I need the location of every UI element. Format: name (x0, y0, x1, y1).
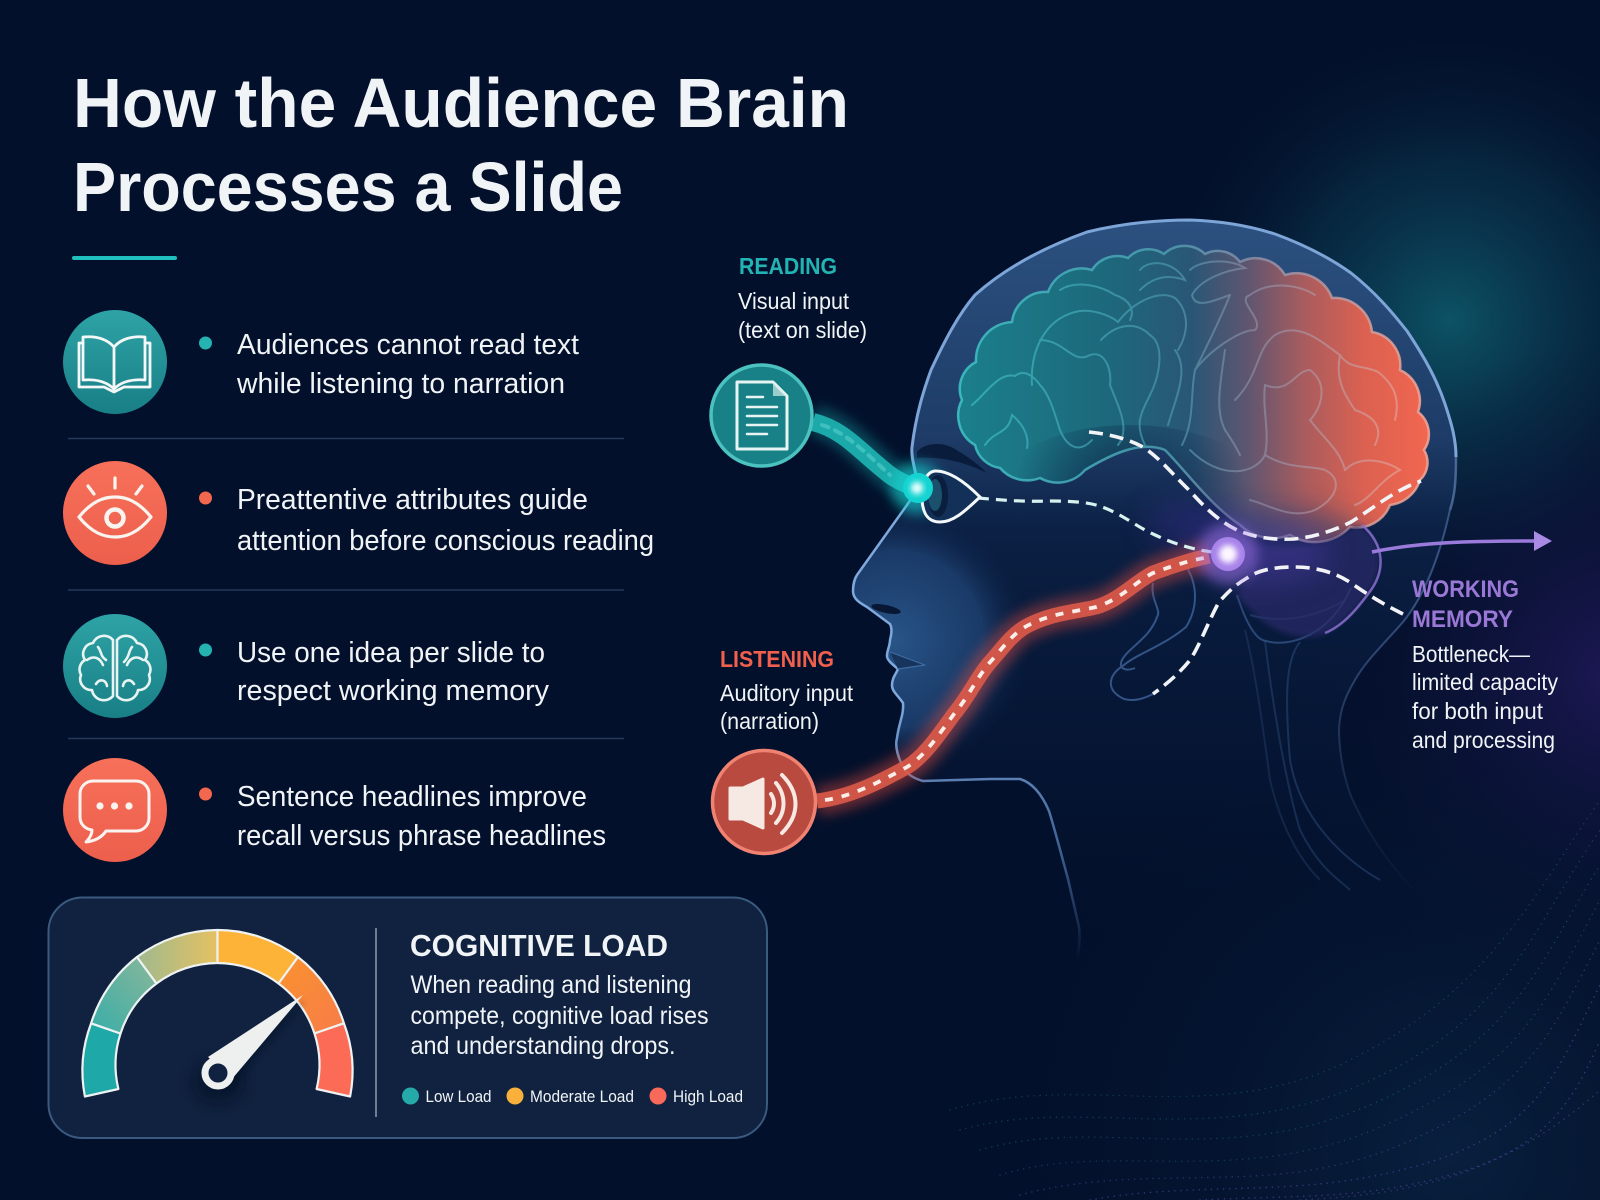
panel: cognitive load (48, 898, 767, 1138)
legend: Low Load (426, 1087, 492, 1106)
gauge needle (205, 995, 306, 1091)
label: working memory: WORKING (1412, 576, 1519, 603)
label: working memory: and processing (1412, 727, 1555, 753)
label: working memory: for both input (1412, 698, 1544, 724)
title underline (72, 256, 177, 260)
arrow: output to working memory label (1372, 531, 1552, 552)
label: reading (738, 253, 867, 343)
mouth (890, 652, 925, 669)
pathway: eye to working memory, dashed (978, 498, 1212, 552)
label: reading: READING (739, 253, 837, 279)
legend: High Load (673, 1087, 743, 1106)
bullet text: recall versus phrase headlines (237, 820, 606, 852)
panel: key takeaways (63, 310, 654, 862)
gauge (82, 930, 353, 1104)
label: working memory (1412, 576, 1558, 753)
bullet dot (199, 788, 212, 800)
item 4: sentence headlines (63, 758, 606, 862)
icon: speaker (712, 750, 816, 854)
pathway: visual input (813, 420, 943, 514)
head silhouette (852, 218, 1458, 952)
legend (402, 1087, 743, 1106)
body text: compete, cognitive load rises (410, 1002, 708, 1030)
bullet dot (199, 644, 212, 656)
label: reading: (text on slide) (738, 317, 867, 343)
icon: open book (63, 310, 167, 414)
pathway: lower dashed route (1153, 567, 1403, 694)
bullet text: attention before conscious reading (237, 525, 654, 557)
bullet dot (199, 492, 212, 504)
bullet dot (199, 336, 212, 350)
label: listening (720, 646, 854, 734)
eyebrow (917, 444, 987, 473)
icon: document (711, 365, 812, 466)
bullet text (237, 637, 549, 707)
item 1: reading while listening (63, 310, 579, 414)
body text (410, 971, 708, 1060)
label: working memory: MEMORY (1412, 606, 1513, 633)
legend: Moderate Load (530, 1087, 634, 1106)
title: How the Audience Brain (73, 64, 849, 142)
icon: brain (63, 614, 167, 718)
heading: cognitive load: COGNITIVE LOAD (410, 928, 668, 963)
bullet text (237, 484, 654, 557)
item 3: one idea per slide (63, 614, 549, 718)
icon: eye on face (903, 471, 980, 522)
nostril (870, 602, 902, 616)
pathway: upper dashed route (1089, 432, 1421, 539)
icon: eye (63, 461, 167, 565)
bullet text: Preattentive attributes guide (237, 484, 588, 516)
bullet text (236, 329, 579, 400)
pathway: auditory input (817, 556, 1215, 801)
bullet text: respect working memory (237, 675, 549, 707)
working memory node (1198, 524, 1258, 584)
label: listening: Auditory input (720, 680, 854, 706)
brain folds (972, 261, 1400, 513)
bullet text (237, 781, 606, 852)
pathway: working memory bottleneck (1145, 501, 1381, 637)
particle wave decoration (950, 800, 1600, 1200)
icon: speech bubble (63, 758, 167, 862)
label: listening: LISTENING (720, 646, 834, 672)
title (73, 64, 849, 226)
ear and inner anatomy (1111, 566, 1380, 890)
item 2: preattentive attributes (63, 461, 654, 565)
bullet text: Use one idea per slide to (237, 637, 545, 669)
label: working memory: limited capacity (1412, 669, 1558, 695)
body text: When reading and listening (410, 971, 692, 999)
bullet text: Sentence headlines improve (237, 781, 587, 813)
bullet text: while listening to narration (236, 368, 565, 400)
label: reading: Visual input (738, 288, 850, 314)
title: Processes a Slide (73, 148, 623, 226)
label: listening: (narration) (720, 708, 819, 734)
brain (956, 244, 1430, 544)
label: working memory: Bottleneck— (1412, 641, 1530, 667)
bullet text: Audiences cannot read text (237, 329, 579, 361)
body text: and understanding drops. (410, 1032, 676, 1060)
